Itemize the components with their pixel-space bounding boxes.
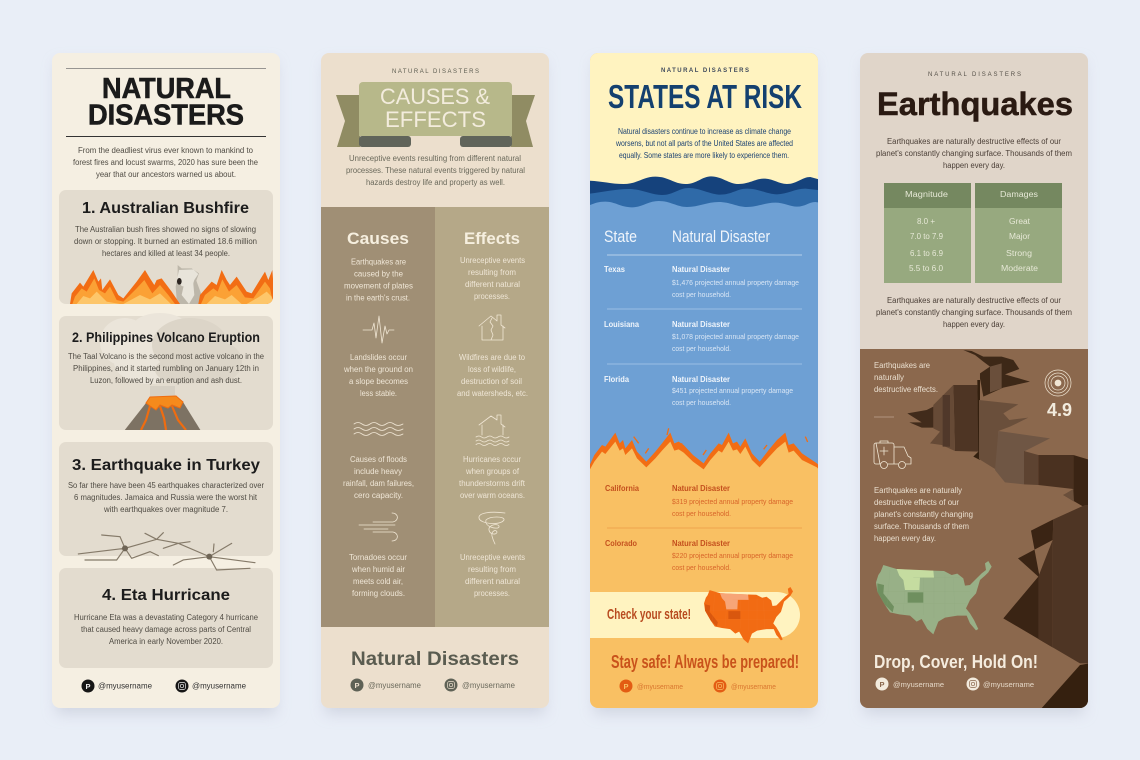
row: California xyxy=(605,484,802,528)
social links: @myusername xyxy=(731,682,776,691)
row: Colorado: Colorado xyxy=(605,539,637,548)
eyebrow: NATURAL DISASTERS xyxy=(392,69,479,75)
social links xyxy=(82,680,247,692)
illustration: volcano xyxy=(124,386,201,431)
eyebrow: NATURAL DISASTERS xyxy=(661,68,749,74)
social links: @myusername xyxy=(368,681,422,690)
body text: planet's constantly changing surface. Thousands of them xyxy=(876,308,1072,317)
column: causes: Causes xyxy=(347,229,409,248)
section: Philippines Volcano Eruption xyxy=(59,313,273,431)
row: Colorado: $220 projected annual property damage xyxy=(672,551,793,560)
table header: Natural Disaster xyxy=(672,227,770,246)
column: causes: Causes of floods xyxy=(350,455,407,464)
column: causes: less stable. xyxy=(360,389,397,398)
social links: @myusername xyxy=(98,682,153,690)
illustration: flame border xyxy=(590,428,818,470)
table: magnitude and damages: Major xyxy=(1009,232,1030,241)
text: destructive effects: naturally xyxy=(874,373,904,382)
title xyxy=(66,68,266,136)
title: STATES AT RISK xyxy=(608,78,802,115)
column: causes: cero capacity. xyxy=(354,491,403,500)
closing message: Stay safe! Always be prepared! xyxy=(611,651,799,672)
row: Florida: cost per household. xyxy=(672,398,731,407)
column: effects: when groups of xyxy=(465,467,520,476)
row: California: $319 projected annual property damage xyxy=(672,497,793,506)
illustration: ground fissure xyxy=(907,350,1090,710)
row: California: Natural Disaster xyxy=(672,484,730,493)
table: magnitude and damages: 7.0 to 7.9 xyxy=(910,232,944,241)
column: causes: rainfall, dam failures, xyxy=(343,479,414,488)
social links: P xyxy=(86,682,91,691)
table: magnitude and damages: Magnitude xyxy=(905,190,949,199)
column: effects: Effects xyxy=(464,229,520,248)
row: Texas: Natural Disaster xyxy=(672,265,730,274)
section: Eta Hurricane: that caused heavy damage across parts of Central xyxy=(81,625,251,634)
panel: earthquakes xyxy=(860,53,1090,710)
icon: seismic rings xyxy=(1045,370,1071,396)
section: Philippines Volcano Eruption: The Taal Volcano is the second most active volcano in the xyxy=(68,352,265,361)
social links: @myusername xyxy=(637,682,683,691)
column: effects: and watersheds, etc. xyxy=(457,389,528,398)
intro text: From the deadliest virus ever known to mankind to xyxy=(78,146,254,155)
text: surface: Earthquakes are naturally xyxy=(874,486,962,495)
table header xyxy=(604,227,802,255)
magnitude value: 4.9 xyxy=(1047,400,1072,420)
row: California: California xyxy=(605,484,639,493)
text: surface: surface. Thousands of them xyxy=(874,522,969,531)
row: Louisiana: cost per household. xyxy=(672,344,731,353)
table: magnitude and damages: 5.5 to 6.0 xyxy=(909,264,944,273)
table: magnitude and damages: 8.0 + xyxy=(917,217,935,226)
column: causes: a slope becomes xyxy=(349,377,408,386)
body text xyxy=(876,296,1072,329)
icon: flooded house xyxy=(476,415,509,446)
intro text: equally. Some states are more likely to experience them. xyxy=(619,151,789,160)
illustration: ash cloud xyxy=(100,313,242,384)
panel: natural disasters overview xyxy=(52,53,280,708)
intro text: forest fires and locust swarms, 2020 has sure been the xyxy=(73,158,259,167)
icon: ambulance xyxy=(874,441,911,468)
text: destructive effects xyxy=(874,361,938,417)
footer heading: Natural Disasters xyxy=(351,649,519,670)
column: causes: when the ground on xyxy=(343,365,413,374)
icon: tornado xyxy=(479,512,505,544)
column: effects: Unreceptive events xyxy=(460,256,525,265)
intro text: planet's constantly changing surface. Thousands of them xyxy=(876,149,1072,158)
icon: seismic pulse xyxy=(363,316,394,343)
column: effects xyxy=(435,207,549,627)
column: causes: Landslides occur xyxy=(350,353,407,362)
illustration: ground cracks xyxy=(78,533,255,570)
column: effects: processes. xyxy=(474,589,510,598)
callout: check your state xyxy=(590,587,800,643)
row: Florida xyxy=(604,375,793,407)
column: effects: thunderstorms drift xyxy=(459,479,526,488)
column: effects: Wildfires are due to xyxy=(459,353,526,362)
table: magnitude and damages: Great xyxy=(1009,217,1031,226)
icon: wind xyxy=(359,513,397,541)
intro text: hazards destroy life and property as well. xyxy=(366,178,505,187)
social links: @myusername xyxy=(192,682,247,690)
illustration: koala and fire xyxy=(70,265,275,304)
social links: P xyxy=(880,680,885,689)
table: magnitude and damages: Moderate xyxy=(1001,264,1039,273)
table header: State xyxy=(604,227,637,246)
section: Earthquake in Turkey: So far there have been 45 earthquakes characterized over xyxy=(68,481,264,490)
row: Louisiana xyxy=(604,320,802,364)
row: California: cost per household. xyxy=(672,509,731,518)
title banner: CAUSES & xyxy=(380,84,490,109)
title: Earthquakes xyxy=(877,86,1073,122)
column: effects: processes. xyxy=(474,292,510,301)
text: destructive effects: destructive effects. xyxy=(874,385,938,394)
row: Louisiana: Natural Disaster xyxy=(672,320,730,329)
intro text xyxy=(876,137,1072,170)
table: magnitude and damages: Damages xyxy=(1000,190,1038,199)
section: Earthquake in Turkey xyxy=(59,442,273,556)
table: magnitude and damages xyxy=(884,183,1062,283)
title: DISASTERS xyxy=(88,100,244,132)
row: Florida: $451 projected annual property damage xyxy=(672,386,793,395)
row: Texas xyxy=(604,265,802,309)
row: Louisiana: $1,078 projected annual property damage xyxy=(672,332,799,341)
social links: @myusername xyxy=(983,680,1034,689)
body text: happen every day. xyxy=(943,320,1005,329)
section: Earthquake in Turkey: with earthquakes over magnitude 7. xyxy=(103,505,228,514)
body text: Earthquakes are naturally destructive effects of our xyxy=(887,296,1061,305)
column: causes: Tornadoes occur xyxy=(349,553,407,562)
intro text: happen every day. xyxy=(943,161,1005,170)
map: United States xyxy=(876,561,992,634)
section: Philippines Volcano Eruption: 2. Philippines Volcano Eruption xyxy=(72,330,260,345)
column: effects: resulting from xyxy=(468,565,516,574)
social links xyxy=(620,680,776,692)
intro text xyxy=(346,154,525,187)
icon: waves xyxy=(354,422,403,436)
column: causes: forming clouds. xyxy=(352,589,405,598)
column: effects: resulting from xyxy=(468,268,516,277)
intro text: worsens, but not all parts of the United States are affected xyxy=(615,139,793,148)
section: Philippines Volcano Eruption: Luzon, followed by an eruption and ash dust. xyxy=(90,376,242,385)
column: effects: destruction of soil xyxy=(461,377,522,386)
map: United States xyxy=(704,587,793,643)
text: surface xyxy=(874,486,973,543)
section: Eta Hurricane xyxy=(59,568,273,668)
social links: P xyxy=(354,681,360,690)
card shadows xyxy=(56,62,1084,714)
section: Philippines Volcano Eruption: Philippines, and it started rumbling on January 12th in xyxy=(73,364,259,373)
row: Texas: Texas xyxy=(604,265,626,274)
text: surface: planet's constantly changing xyxy=(874,510,973,519)
table: magnitude and damages: 6.1 to 6.9 xyxy=(910,249,944,258)
section: Earthquake in Turkey: 3. Earthquake in Turkey xyxy=(72,457,260,474)
section: Eta Hurricane: Hurricane Eta was a devastating Category 4 hurricane xyxy=(74,613,259,622)
section: Earthquake in Turkey: 6 magnitudes. Jamaica and Russia were the worst hit xyxy=(74,493,258,502)
row: Colorado xyxy=(605,539,793,572)
column: causes: caused by the xyxy=(354,270,404,278)
row: Colorado: cost per household. xyxy=(672,563,731,572)
intro text: Unreceptive events resulting from different natural xyxy=(349,154,521,163)
column: causes: include heavy xyxy=(354,467,402,476)
panel: states at risk xyxy=(587,53,824,708)
column: causes: meets cold air, xyxy=(353,577,403,586)
callout: check your state: Check your state! xyxy=(607,606,691,623)
title banner: EFFECTS xyxy=(385,107,486,132)
column: effects: loss of wildlife, xyxy=(468,365,516,374)
column: effects: over warm oceans. xyxy=(460,491,525,500)
intro text xyxy=(615,127,793,160)
column: causes xyxy=(321,207,435,627)
social links: @myusername xyxy=(893,680,944,689)
eyebrow: NATURAL DISASTERS xyxy=(928,72,1021,78)
section: Australian Bushfire: down or stopping. It burned an estimated 18.6 million xyxy=(74,237,257,246)
column: causes: in the earth's crust. xyxy=(346,294,410,302)
section: Australian Bushfire: The Australian bush fires showed no signs of slowing xyxy=(75,225,256,234)
intro text xyxy=(73,146,259,179)
row: Colorado: Natural Disaster xyxy=(672,539,730,548)
column: causes: movement of plates xyxy=(344,282,413,290)
section: Eta Hurricane: America in early November 2020. xyxy=(109,637,223,646)
table: magnitude and damages: Strong xyxy=(1006,249,1032,258)
social links: P xyxy=(624,682,629,691)
social links: @myusername xyxy=(462,681,516,690)
closing message: Drop, Cover, Hold On! xyxy=(874,652,1038,672)
title banner xyxy=(336,82,535,147)
text: surface: happen every day. xyxy=(874,534,936,543)
column: causes: when humid air xyxy=(351,565,405,574)
panel: causes and effects xyxy=(321,53,549,708)
column: effects: Unreceptive events xyxy=(460,553,525,562)
column: causes: Earthquakes are xyxy=(351,258,407,266)
column: effects: different natural xyxy=(465,577,520,586)
social links xyxy=(350,678,516,692)
column: effects: different natural xyxy=(465,280,520,289)
text: surface: destructive effects of our xyxy=(874,498,959,507)
text: destructive effects: Earthquakes are xyxy=(874,361,931,370)
social links xyxy=(876,678,1034,690)
row: Texas: cost per household. xyxy=(672,290,731,299)
row: Florida: Florida xyxy=(604,375,630,384)
icon: cracked house xyxy=(479,315,505,340)
section: Eta Hurricane: 4. Eta Hurricane xyxy=(102,587,230,604)
column: effects: Hurricanes occur xyxy=(463,455,521,464)
intro text: year that our ancestors warned us about. xyxy=(96,170,236,179)
intro text: processes. These natural events triggered by natural xyxy=(346,166,525,175)
row: Texas: $1,476 projected annual property damage xyxy=(672,278,799,287)
waves xyxy=(590,176,818,208)
section: Australian Bushfire: hectares and killed at least 34 people. xyxy=(102,249,230,258)
section: Australian Bushfire xyxy=(59,190,275,304)
section: Australian Bushfire: 1. Australian Bushfire xyxy=(82,200,249,217)
title: NATURAL xyxy=(102,73,231,105)
row: Florida: Natural Disaster xyxy=(672,375,730,384)
intro text: Earthquakes are naturally destructive effects of our xyxy=(887,137,1061,146)
row: Louisiana: Louisiana xyxy=(604,320,640,329)
intro text: Natural disasters continue to increase as climate change xyxy=(618,127,791,136)
